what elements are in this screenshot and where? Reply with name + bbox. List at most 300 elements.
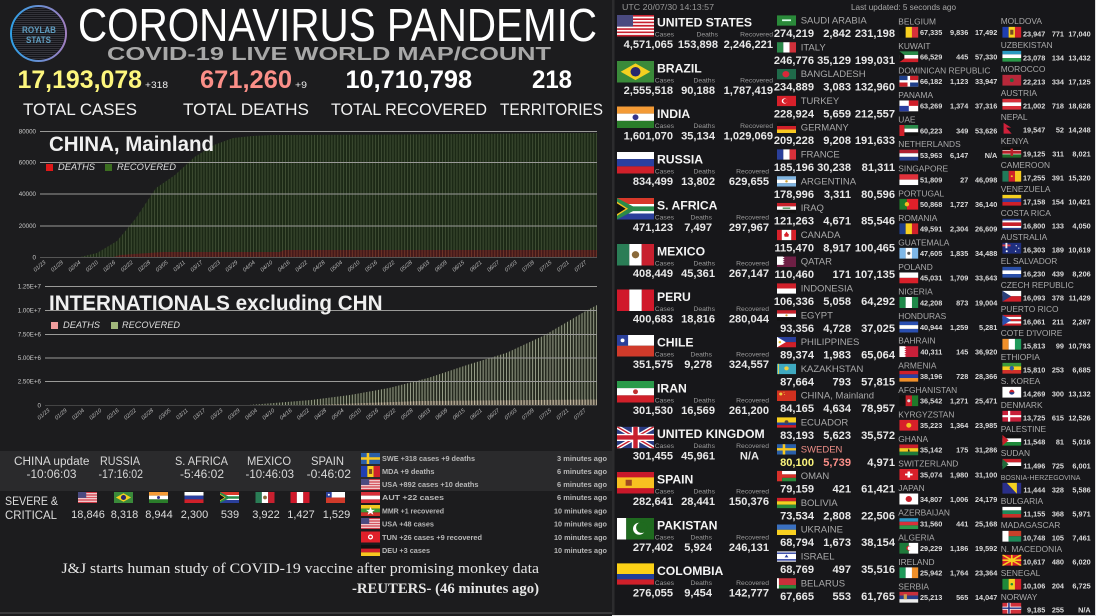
row: Cote d'Ivoire: COTE D'IVOIRE <box>1001 328 1063 338</box>
row: Bosnia-Herzegovina <box>1001 475 1091 495</box>
row: Madagascar: MADAGASCAR <box>1001 520 1060 530</box>
row: Moldova: 23,947 <box>1023 30 1045 39</box>
row: Portugal: 50,868 <box>920 200 942 209</box>
row: Azerbaijan <box>898 508 997 529</box>
row: South Korea: 14,269 <box>1023 390 1045 399</box>
row: Ecuador: 5,623 <box>823 430 851 442</box>
chart: international excluding China <box>18 284 597 422</box>
panel: update countdowns: S. AFRICA <box>175 456 228 468</box>
row: Switzerland: 35,074 <box>920 470 943 479</box>
row: India <box>617 106 773 142</box>
row: Oman: 61,421 <box>861 484 895 496</box>
row: Peru <box>617 290 770 326</box>
row: France: 185,196 <box>774 162 814 174</box>
row: Egypt <box>777 310 895 335</box>
row: Ghana: GHANA <box>898 434 928 444</box>
row: Venezuela <box>1001 184 1091 207</box>
row: Ukraine: UKRAINE <box>801 525 843 536</box>
chart: international excluding China: 04/10 <box>262 407 277 422</box>
row: Canada: 115,470 <box>774 242 814 254</box>
row: Japan: 24,179 <box>975 495 997 504</box>
row: Saudi Arabia <box>774 15 895 40</box>
row: Cameroon: 15,320 <box>1068 174 1091 183</box>
row: Chile: Deaths <box>690 352 713 358</box>
row: Turkey <box>774 96 895 120</box>
row: Cameroon: 391 <box>1052 174 1064 183</box>
row: Ecuador: 83,193 <box>780 430 814 442</box>
row: Egypt: 37,025 <box>861 323 895 335</box>
row: Australia: 10,619 <box>1068 246 1091 255</box>
panel: update countdowns: -0:46:02 <box>307 469 351 481</box>
row: Ecuador: 35,572 <box>861 430 895 442</box>
row: Morocco: 334 <box>1052 78 1065 87</box>
column: third tier countries <box>898 16 998 603</box>
row: United States: UNITED STATES <box>657 16 752 30</box>
row: Philippines: 89,374 <box>780 350 815 362</box>
chart: China mainland deaths and recovered: 07/09 <box>521 260 536 274</box>
chart: China mainland deaths and recovered: 07/27 <box>574 259 589 274</box>
row: Armenia: 38,196 <box>920 372 942 381</box>
chart: international excluding China: 2.50E+6 <box>18 378 42 386</box>
row: Israel: 35,516 <box>861 564 895 576</box>
row: Qatar: 110,460 <box>774 269 814 281</box>
row: Norway: NORWAY <box>1001 592 1038 602</box>
row: Nigeria <box>898 287 998 308</box>
panel: severe and critical counts: 18,846 <box>71 509 105 521</box>
row: Nepal: 14,248 <box>1068 126 1091 135</box>
row: North Macedonia: 6,020 <box>1072 558 1091 567</box>
row: Madagascar: 10,748 <box>1023 534 1045 543</box>
row: Belgium: 67,335 <box>920 28 942 37</box>
row: Puerto Rico: 211 <box>1052 318 1064 327</box>
row: Guatemala: 47,605 <box>920 249 942 258</box>
legend: China chart <box>46 162 176 173</box>
row: Nigeria: 42,208 <box>920 298 942 307</box>
row: Qatar: 171 <box>832 269 851 281</box>
legend: international chart: DEATHS <box>63 320 101 331</box>
row: Armenia: 28,366 <box>975 372 997 381</box>
row: Guatemala: 1,835 <box>950 249 968 258</box>
panel: update countdowns: -10:46:03 <box>246 469 294 481</box>
row: Honduras <box>898 311 997 332</box>
row: United Kingdom: UNITED KINGDOM <box>657 427 765 441</box>
row: Belarus <box>777 578 895 603</box>
row: Serbia: 565 <box>956 593 968 602</box>
row: Kenya: 311 <box>1052 150 1064 159</box>
row: Norway: 255 <box>1052 606 1064 615</box>
row: Sudan: 725 <box>1052 462 1064 471</box>
row: North Macedonia: 480 <box>1052 558 1064 567</box>
chart: international excluding China: 03/23 <box>210 407 225 422</box>
row: Armenia <box>898 360 997 382</box>
row: Spain <box>617 472 769 508</box>
row: South Africa: S. AFRICA <box>657 198 718 212</box>
row: Portugal: 36,140 <box>975 200 997 209</box>
row: Ireland: 25,942 <box>920 568 942 578</box>
row: Iran: Recovered <box>736 398 769 404</box>
chart: international excluding China: 06/09 <box>435 408 449 422</box>
chart: international excluding China: 5.00E+6 <box>18 355 42 362</box>
row: Bulgaria: 11,155 <box>1023 510 1045 519</box>
panel: severe and critical counts: 8,318 <box>111 509 138 521</box>
row: South Korea: 13,132 <box>1068 390 1091 399</box>
row: Bangladesh <box>774 69 895 94</box>
row: Sweden highlighted: 5,739 <box>823 457 851 469</box>
row: Iran: 301,530 <box>633 405 673 417</box>
row: Palestine <box>1001 424 1091 447</box>
row: Brazil: Recovered <box>740 78 773 84</box>
row: Kazakhstan <box>777 364 895 388</box>
row: Kazakhstan: 793 <box>832 376 851 388</box>
row: Romania: ROMANIA <box>898 213 938 223</box>
icon: Roylab Stats logo <box>11 6 66 61</box>
row: China mainland: 4,634 <box>823 403 852 415</box>
row: Panama: 37,316 <box>975 102 997 111</box>
row: North Macedonia: 10,617 <box>1023 558 1045 567</box>
row: Qatar: 107,135 <box>855 269 895 281</box>
chart: international excluding China: 06/21 <box>469 408 484 422</box>
row: Kenya: KENYA <box>1001 136 1029 146</box>
row: Peru: Cases <box>655 306 675 313</box>
row: Bosnia-Herzegovina: 328 <box>1052 486 1064 495</box>
row: Italy: 35,129 <box>817 55 851 67</box>
row: Poland <box>898 262 997 283</box>
chart: international excluding China: 04/04 <box>244 408 259 422</box>
row: Guatemala <box>898 237 997 259</box>
row: Italy: 199,031 <box>855 55 895 67</box>
row: Senegal: SENEGAL <box>1001 568 1041 578</box>
panel: recent updates feed: DEU +3 cases <box>382 546 430 555</box>
row: Canada: CANADA <box>801 230 841 241</box>
row: Chile: 351,575 <box>633 359 673 371</box>
chart: international excluding China: 07/15 <box>538 407 554 422</box>
row: Pakistan <box>617 518 769 554</box>
row: Chile <box>617 335 769 371</box>
row: Pakistan: 246,131 <box>729 542 769 554</box>
row: South Africa: Recovered <box>736 214 769 222</box>
row: India: Cases <box>655 123 675 130</box>
chart: international excluding China: 02/16 <box>106 407 121 422</box>
panel: severe and critical counts: 1,529 <box>323 509 350 521</box>
row: Nepal: 52 <box>1056 126 1064 135</box>
row: Peru: PERU <box>657 290 691 304</box>
panel: recent updates feed: 6 minutes ago <box>557 467 607 476</box>
row: Brazil: Deaths <box>693 78 716 84</box>
row: Iran: Deaths <box>693 398 716 404</box>
row: Mexico: MEXICO <box>657 244 705 258</box>
row: Pakistan: 277,402 <box>633 542 673 554</box>
stat: territories <box>500 66 603 119</box>
row: Poland: 33,643 <box>975 274 997 283</box>
panel: update countdowns: SPAIN <box>311 456 344 468</box>
panel: recent updates feed: 3 minutes ago <box>557 454 607 463</box>
row: Iran: 261,200 <box>729 405 769 417</box>
row: Bahrain: 145 <box>956 347 968 356</box>
row: Qatar: QATAR <box>801 257 832 268</box>
row: Belgium <box>898 16 997 38</box>
row: Switzerland: 1,980 <box>950 470 968 479</box>
row: Austria: 21,002 <box>1023 102 1045 111</box>
chart: international excluding China: 05/10 <box>348 407 363 422</box>
row: Nigeria: 19,004 <box>975 298 998 307</box>
row: Bulgaria: 5,971 <box>1072 510 1091 519</box>
row: Egypt: 4,728 <box>823 323 851 335</box>
row: Belgium: 9,836 <box>950 28 968 37</box>
row: Ghana: 175 <box>956 446 968 455</box>
chart: international excluding China: 01/23 <box>37 407 52 422</box>
row: France: 30,238 <box>817 162 851 174</box>
row: Azerbaijan: 25,168 <box>975 519 997 528</box>
row: Bolivia <box>777 498 895 522</box>
chart: China mainland deaths and recovered: 07/15 <box>539 259 554 274</box>
row: Spain: 150,376 <box>729 496 769 508</box>
row: Argentina: ARGENTINA <box>801 176 857 187</box>
row: Costa Rica: 16,800 <box>1023 222 1045 231</box>
row: Ireland: IRELAND <box>898 557 935 567</box>
chart: international excluding China: 04/16 <box>279 407 294 422</box>
row: Austria: 18,628 <box>1068 102 1091 111</box>
chart: China mainland deaths and recovered: 03/23 <box>207 259 222 274</box>
row: Brazil: 90,188 <box>681 85 715 97</box>
row: Puerto Rico: 2,267 <box>1072 318 1091 327</box>
row: Venezuela: 17,158 <box>1023 198 1045 207</box>
chart: China mainland deaths and recovered: 03/05 <box>155 259 170 274</box>
row: Nigeria: 873 <box>956 298 968 307</box>
row: Brazil: 2,555,518 <box>624 85 673 97</box>
row: Indonesia: 106,336 <box>774 296 814 308</box>
row: North Macedonia <box>1001 544 1091 567</box>
row: Azerbaijan: AZERBAIJAN <box>898 508 950 518</box>
row: Kuwait <box>898 41 997 62</box>
row: Kazakhstan: KAZAKHSTAN <box>801 364 863 375</box>
panel: update countdowns: CHINA update <box>14 456 90 468</box>
chart: international excluding China: 7.50E+6 <box>18 332 42 338</box>
row: Ukraine: 68,794 <box>780 537 815 549</box>
row: Iraq <box>774 203 895 228</box>
row: Brazil <box>617 61 773 97</box>
chart: international excluding China: 02/28 <box>141 407 156 422</box>
row: United States <box>617 15 773 51</box>
row: Senegal: 6,725 <box>1072 582 1091 591</box>
row: Morocco: MOROCCO <box>1001 64 1046 74</box>
row: Austria: AUSTRIA <box>1001 88 1037 98</box>
row: Belarus: BELARUS <box>801 578 845 589</box>
row: Germany: 191,633 <box>855 135 895 147</box>
row: Madagascar: 105 <box>1052 534 1064 543</box>
row: Russia <box>617 152 769 188</box>
panel: recent updates feed: MDA +9 deaths <box>382 467 434 476</box>
chart: China mainland deaths and recovered: 04/04 <box>242 260 257 274</box>
row: Dominican Republic <box>898 65 997 87</box>
row: Russia: 13,802 <box>681 176 715 188</box>
panel: recent updates feed: 10 minutes ago <box>554 520 607 528</box>
row: Denmark: 12,526 <box>1068 414 1091 423</box>
row: Colombia: COLOMBIA <box>657 564 724 578</box>
row: India: Deaths <box>693 123 716 130</box>
chart: international excluding China: 1.00E+7 <box>18 308 42 314</box>
row: Honduras: 5,281 <box>979 323 997 332</box>
row: Poland: 45,031 <box>920 274 942 283</box>
stat: total cases: +318 <box>145 80 168 90</box>
row: Senegal: 10,106 <box>1023 582 1045 591</box>
row: Madagascar <box>1001 520 1091 543</box>
row: Bangladesh: 132,960 <box>855 82 895 94</box>
stat: total cases <box>18 66 168 119</box>
row: Algeria <box>898 532 997 554</box>
row: Bangladesh: BANGLADESH <box>801 69 866 80</box>
row: Austria <box>1001 88 1091 111</box>
row: Ireland: 1,764 <box>950 568 969 578</box>
row: Kuwait: 66,529 <box>920 53 942 62</box>
row: Dominican Republic: DOMINICAN REPUBLIC <box>898 65 990 75</box>
row: El Salvador: EL SALVADOR <box>1001 256 1057 266</box>
chart: international excluding China: 07/03 <box>504 407 519 422</box>
row: Germany <box>774 122 895 147</box>
row: Bosnia-Herzegovina: 11,444 <box>1023 486 1046 495</box>
row: Armenia: ARMENIA <box>898 360 937 370</box>
row: United Kingdom <box>617 427 769 463</box>
row: Singapore: 51,809 <box>920 175 942 184</box>
row: Switzerland: 31,100 <box>975 470 997 479</box>
row: Bolivia: 2,808 <box>823 510 851 522</box>
chart: China mainland deaths and recovered: 01/29 <box>50 260 65 274</box>
row: Germany: 9,208 <box>823 135 851 147</box>
row: UAE: 349 <box>956 126 968 135</box>
row: Denmark: 615 <box>1052 414 1064 423</box>
row: Sudan: 6,001 <box>1072 462 1091 471</box>
row: Bolivia: BOLIVIA <box>801 498 838 509</box>
stat: total cases: 17,193,078 <box>18 66 142 94</box>
chart: China mainland deaths and recovered: 02/10 <box>85 259 100 274</box>
row: Saudi Arabia: 274,219 <box>774 28 814 40</box>
chart: China mainland deaths and recovered: 05/22 <box>382 259 397 274</box>
row: Puerto Rico: PUERTO RICO <box>1001 304 1059 314</box>
row: Pakistan: Cases <box>655 534 675 542</box>
row: Algeria: ALGERIA <box>898 532 935 542</box>
row: Ireland <box>898 557 998 578</box>
row: Moldova <box>1001 16 1091 39</box>
news headline: J&J starts human study of COVID-19 vaccine after promising monkey data <box>62 561 539 577</box>
row: El Salvador: 8,206 <box>1072 270 1091 279</box>
row: Afghanistan: 25,471 <box>975 397 997 406</box>
row: Chile: 9,278 <box>684 359 712 371</box>
row: Netherlands: NETHERLANDS <box>898 139 961 149</box>
chart: international excluding China: 06/27 <box>487 407 502 422</box>
stat: total deaths: TOTAL DEATHS <box>183 100 309 119</box>
row: Ukraine: 1,673 <box>823 537 851 549</box>
row: Kazakhstan: 57,815 <box>861 376 895 388</box>
row: Belgium: BELGIUM <box>898 16 936 26</box>
chart: China mainland deaths and recovered: 03/29 <box>225 260 239 274</box>
row: Belarus: 67,665 <box>780 591 814 603</box>
row: Ecuador <box>777 417 895 442</box>
chart: China mainland deaths and recovered: 80000 <box>19 128 37 136</box>
row: India: INDIA <box>657 107 690 121</box>
row: Bolivia: 22,506 <box>861 510 895 522</box>
row: Honduras: 40,944 <box>920 323 943 332</box>
stat: total recovered: 10,710,798 <box>346 66 472 94</box>
row: Indonesia <box>774 283 895 308</box>
row: South Korea: S. KOREA <box>1001 376 1041 386</box>
row: Indonesia: INDONESIA <box>801 284 854 294</box>
row: Ukraine: 38,154 <box>861 537 896 549</box>
row: Sweden highlighted <box>777 444 895 469</box>
row: India: Recovered <box>740 123 773 130</box>
row: Oman: OMAN <box>801 471 829 482</box>
panel: update countdowns: MEXICO <box>247 456 291 468</box>
panel: update countdowns: -10:06:03 <box>26 469 76 481</box>
row: Israel <box>777 551 895 576</box>
panel: severe and critical counts: 8,944 <box>145 509 173 521</box>
row: Indonesia: 64,292 <box>861 296 895 308</box>
chart: China mainland deaths and recovered: 05/16 <box>364 259 380 274</box>
row: Canada <box>774 230 895 254</box>
row: Kuwait: KUWAIT <box>898 41 931 51</box>
row: Oman: 421 <box>832 484 851 496</box>
row: Czech Republic: 378 <box>1052 294 1064 303</box>
row: Spain: 28,441 <box>681 496 715 508</box>
row: Germany: GERMANY <box>801 123 849 134</box>
row: Nepal <box>1001 112 1091 135</box>
row: Australia: AUSTRALIA <box>1001 232 1048 242</box>
row: Peru: 400,683 <box>633 314 673 326</box>
stat: territories: 218 <box>532 66 572 94</box>
row: Kenya: 8,021 <box>1072 150 1091 159</box>
row: Serbia <box>898 581 997 603</box>
row: Moldova: MOLDOVA <box>1001 16 1042 26</box>
row: Denmark: 13,725 <box>1023 414 1045 423</box>
row: Bahrain: 40,311 <box>920 347 942 356</box>
row: Italy: 246,776 <box>774 55 814 67</box>
row: Iraq: 85,546 <box>861 216 895 228</box>
row: Dominican Republic: 33,947 <box>975 77 997 86</box>
row: Colombia: 142,777 <box>729 587 769 599</box>
row: Bosnia-Herzegovina: BOSNIA-HERZEGOVINA <box>1001 475 1081 482</box>
row: Czech Republic: 16,093 <box>1023 294 1045 303</box>
row: Pakistan: 5,924 <box>684 542 713 554</box>
panel: recent updates feed: 10 minutes ago <box>554 546 607 555</box>
row: Azerbaijan: 441 <box>956 519 968 528</box>
chart: international excluding China: 03/11 <box>175 408 190 421</box>
row: Argentina: 80,596 <box>861 189 895 201</box>
row: Afghanistan: AFGHANISTAN <box>898 385 957 395</box>
row: Costa Rica: COSTA RICA <box>1001 208 1051 218</box>
row: Afghanistan: 1,271 <box>950 397 968 406</box>
chart: international excluding China: 03/29 <box>227 408 242 422</box>
row: United States: 2,246,221 <box>724 39 773 51</box>
chart: China mainland deaths and recovered: 0 <box>33 254 37 262</box>
row: China mainland: CHINA, Mainland <box>801 391 874 402</box>
row: Japan <box>898 483 997 504</box>
row: Senegal: 204 <box>1052 582 1065 591</box>
row: Switzerland: SWITZERLAND <box>898 459 958 469</box>
legend: China chart: RECOVERED <box>117 162 176 173</box>
row: Palestine: PALESTINE <box>1001 424 1047 434</box>
stat: territories: TERRITORIES <box>500 100 603 119</box>
row: Moldova: 771 <box>1052 30 1064 39</box>
row: Colombia: 276,055 <box>633 587 673 599</box>
chart: China mainland deaths and recovered: 06/03 <box>417 259 432 274</box>
row: Pakistan: PAKISTAN <box>657 518 717 532</box>
chart: China mainland deaths and recovered: 03/11 <box>173 260 187 273</box>
chart: international excluding China: 05/16 <box>365 407 381 422</box>
legend: international chart: RECOVERED <box>122 320 180 331</box>
legend: China chart: DEATHS <box>58 162 96 173</box>
row: Egypt: EGYPT <box>801 310 833 321</box>
row: Canada: 100,465 <box>855 242 895 254</box>
title: CORONAVIRUS PANDEMIC <box>78 0 597 51</box>
row: Mexico: Cases <box>655 260 675 268</box>
